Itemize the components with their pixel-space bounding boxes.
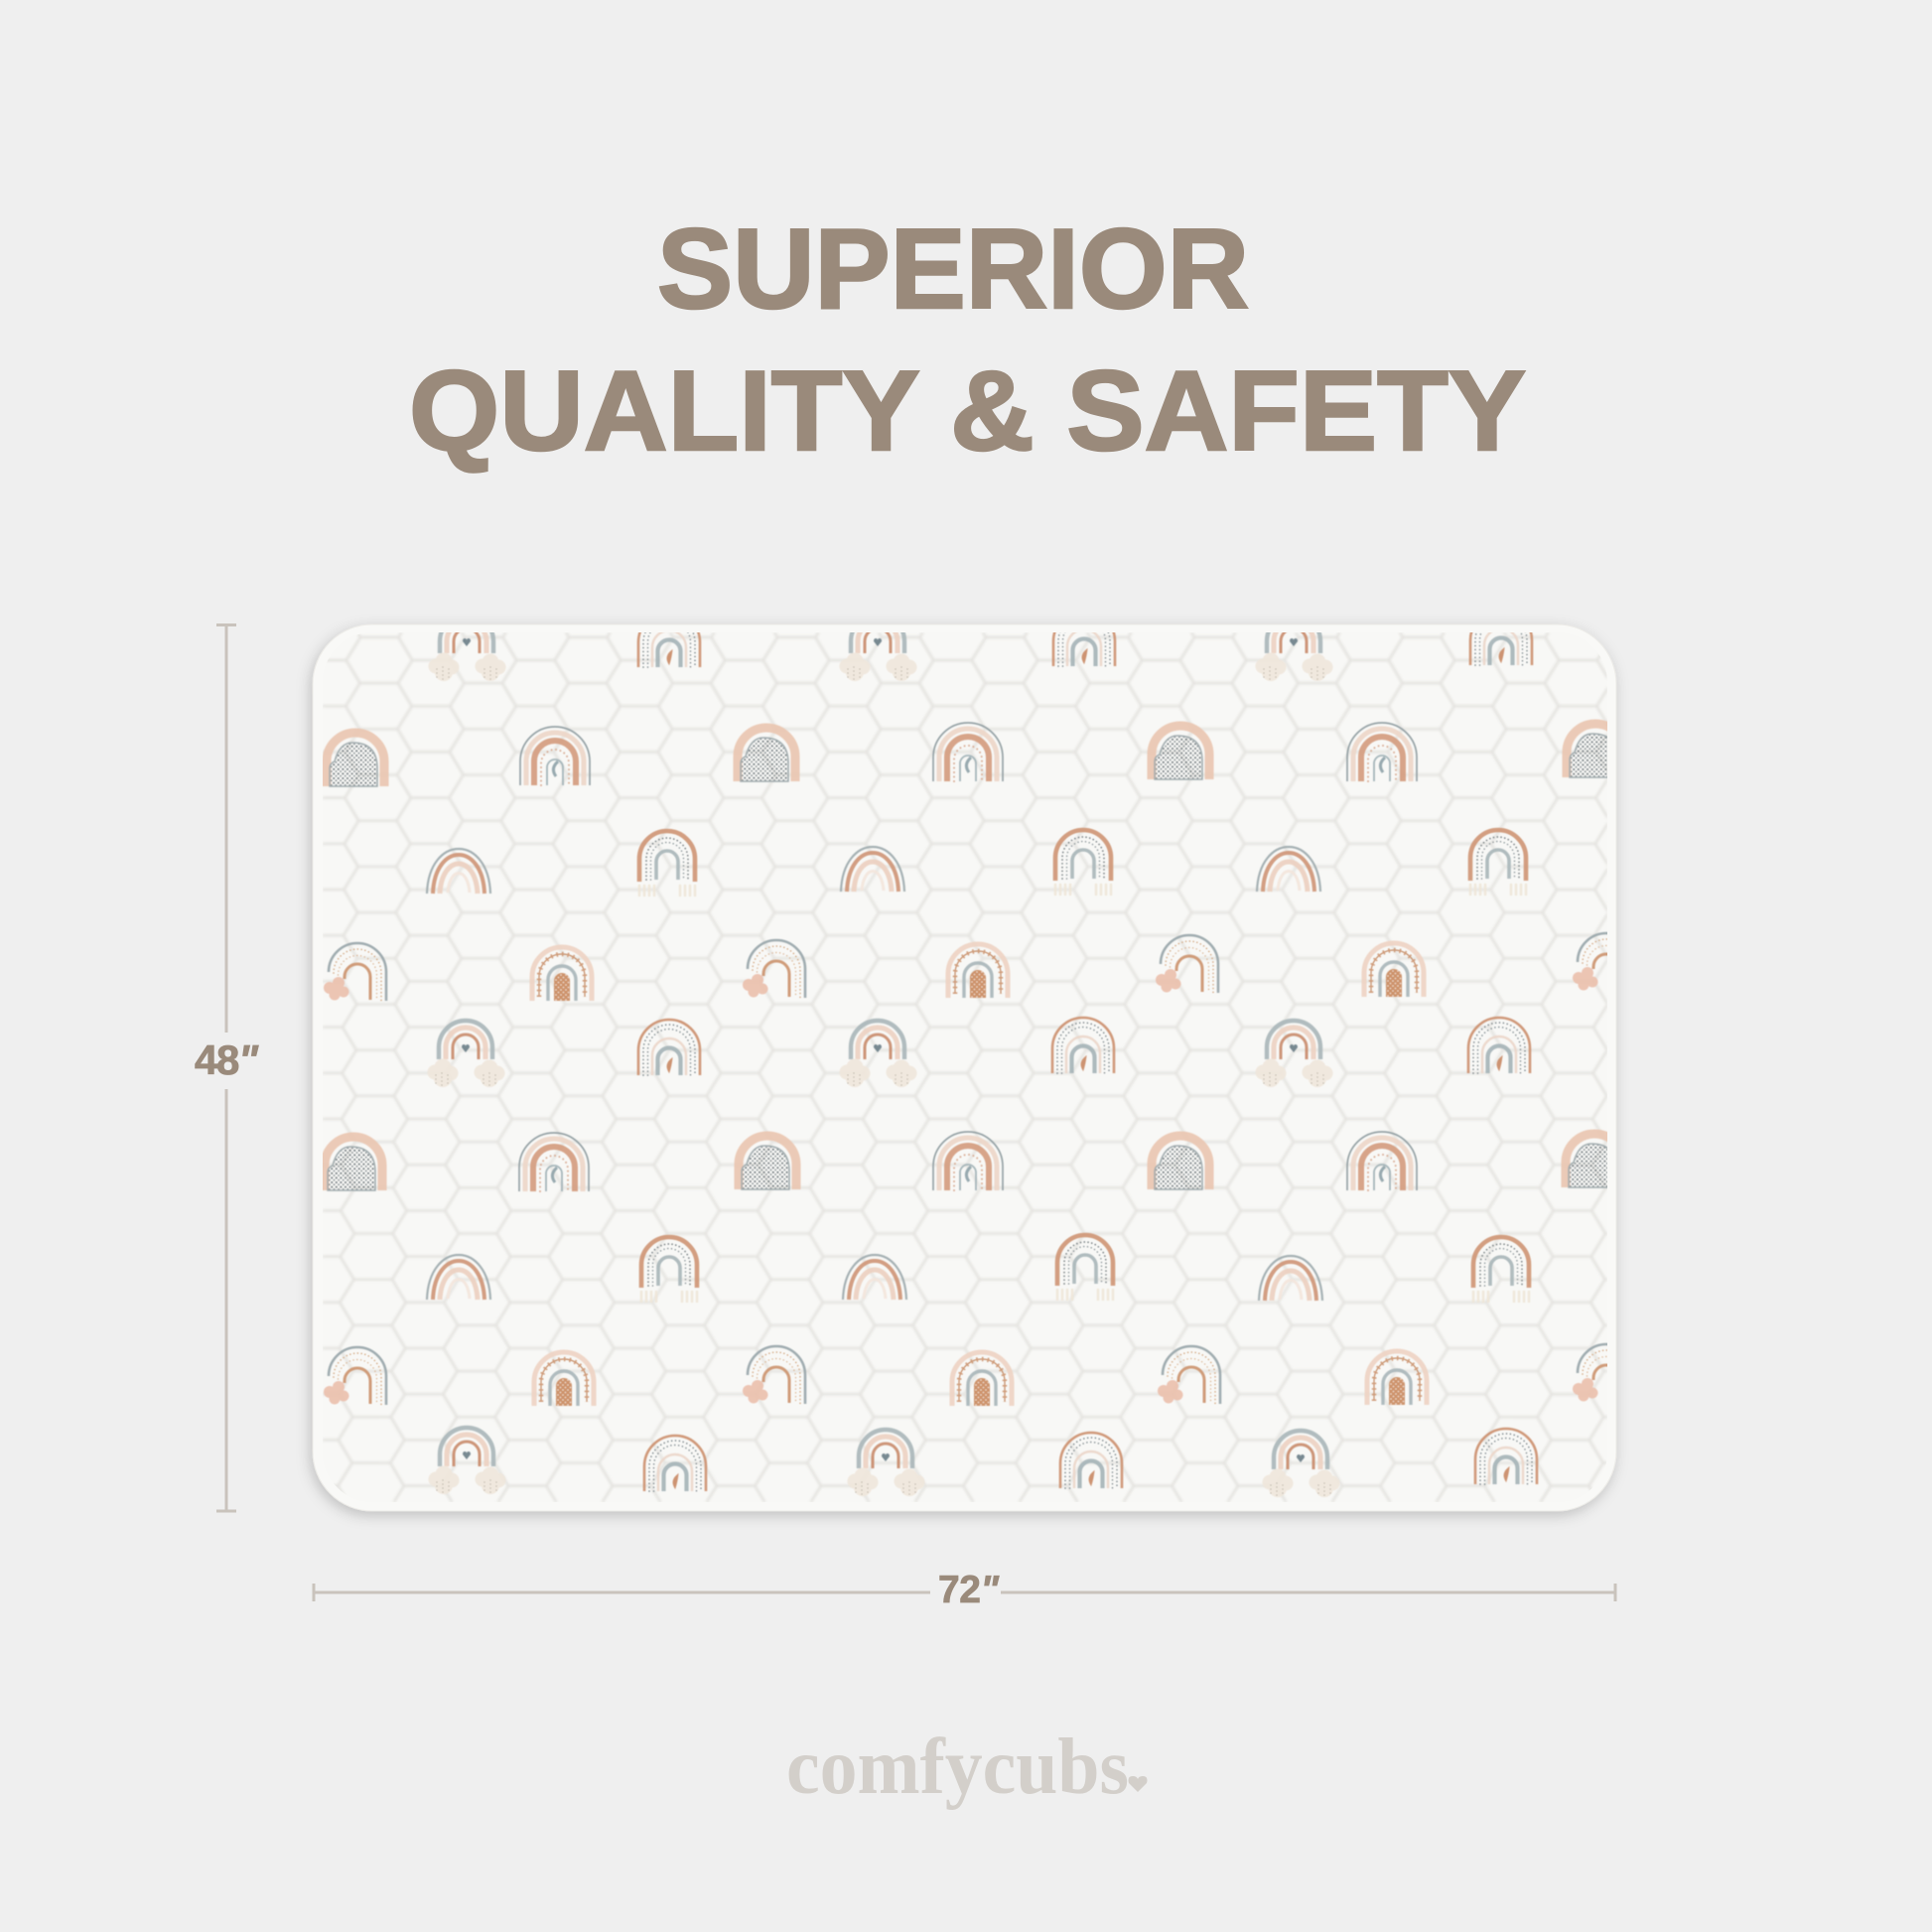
height label: 48" — [195, 1036, 259, 1083]
width dimension ruler — [314, 1569, 1615, 1611]
rainbow row 9 — [429, 1428, 1537, 1497]
rainbow row 3 — [427, 830, 1526, 897]
width label: 72" — [938, 1569, 999, 1611]
rainbow row 2 — [327, 723, 1624, 786]
rainbow row 8 — [324, 1344, 1635, 1406]
rainbow row 4 — [324, 933, 1635, 1001]
rainbow row 6 — [325, 1132, 1623, 1191]
rainbow print — [324, 610, 1635, 1497]
mat binding edge — [313, 624, 1616, 1511]
title line 2: QUALITY & SAFETY — [409, 348, 1526, 475]
logo wordmark: comfycubs — [786, 1724, 1129, 1811]
icon: heart — [1128, 1776, 1148, 1792]
height dimension ruler — [195, 625, 259, 1511]
rainbow row 1 — [429, 632, 1534, 681]
quilted play mat — [313, 610, 1635, 1511]
comfycubs logo — [786, 1724, 1148, 1811]
rainbow row 7 — [427, 1235, 1529, 1303]
rainbow row 5 — [427, 1018, 1530, 1087]
title line 1: SUPERIOR — [657, 207, 1249, 333]
mat quilted surface — [323, 632, 1607, 1502]
title — [409, 207, 1526, 475]
